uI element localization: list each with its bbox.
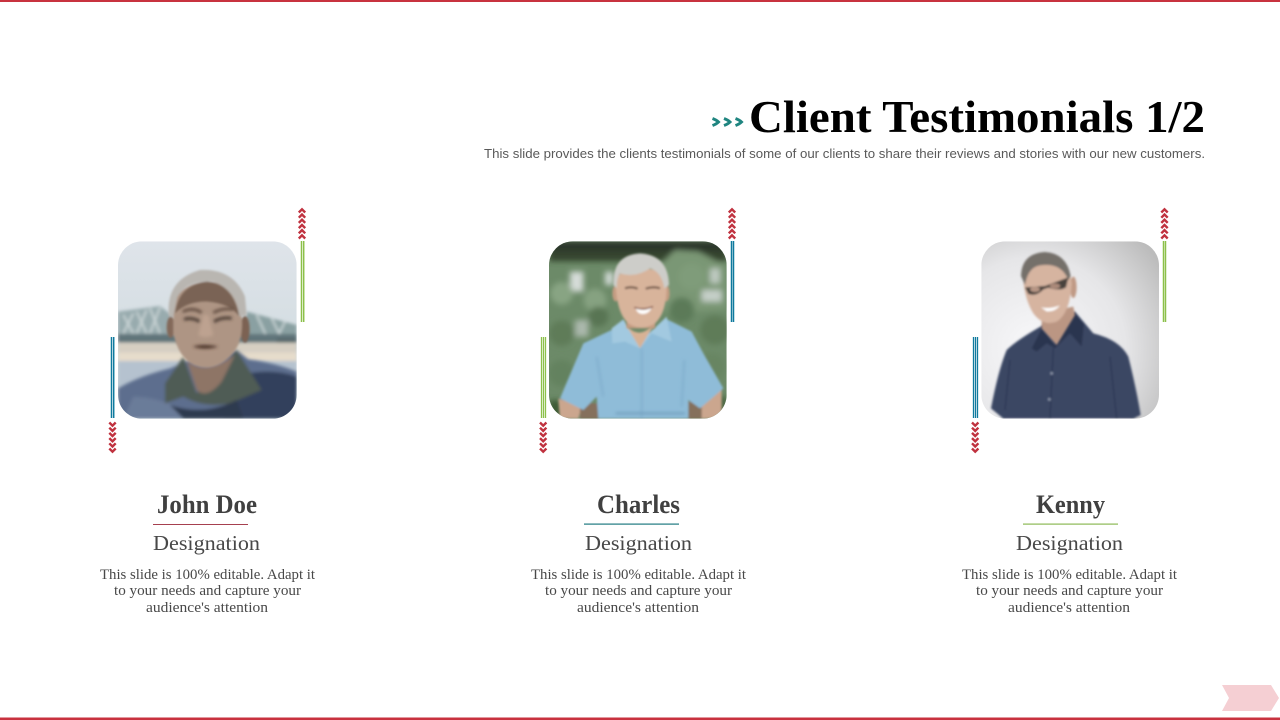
name underline [1023,524,1118,525]
description: This slide is 100% editable. Adapt it [531,567,747,583]
designation: Designation [1016,531,1123,555]
bottom border [0,718,1280,720]
description [962,567,1178,616]
photo: John Doe [118,241,297,419]
chevrons: down [109,422,116,452]
next-page arrow [1222,685,1279,711]
name: John Doe: John Doe [157,490,257,519]
title: Client Testimonials 1/2 [749,91,1205,142]
chevrons: down [540,422,546,452]
accent lines: left green [542,337,546,418]
accent lines: left blue [112,337,114,418]
chevrons: up [1161,209,1168,238]
top border [0,0,1280,2]
accent lines: right green [302,241,304,322]
accent lines: right blue [732,241,734,322]
description: audience's attention [577,600,700,616]
description: This slide is 100% editable. Adapt it [962,567,1178,583]
name underline [584,524,679,525]
name: Charles: Charles [597,490,680,519]
designation: Designation [153,531,260,555]
description: to your needs and capture your [976,583,1163,599]
description [531,567,747,616]
panel: Kenny [962,209,1178,616]
description [100,567,316,616]
photo: Kenny [981,241,1159,419]
subtitle: This slide provides the clients testimonials of some of our clients to share their reviews and stories with our new customers. [484,147,1205,161]
chevrons: up [299,209,305,238]
description: audience's attention [1008,600,1131,616]
title decoration: teal chevrons [712,118,742,126]
name: Kenny: Kenny [1036,490,1105,519]
photo: Charles [548,241,730,419]
description: to your needs and capture your [114,583,301,599]
chevrons: up [729,209,735,238]
name underline [153,524,248,525]
description: to your needs and capture your [545,583,732,599]
description: audience's attention [146,600,269,616]
panel: Charles [531,209,747,616]
accent lines: right green [1164,241,1166,322]
description: This slide is 100% editable. Adapt it [100,567,316,583]
designation: Designation [585,531,692,555]
accent lines: left blue [974,337,978,418]
panel: John Doe [100,209,316,616]
chevrons: down [972,422,978,452]
